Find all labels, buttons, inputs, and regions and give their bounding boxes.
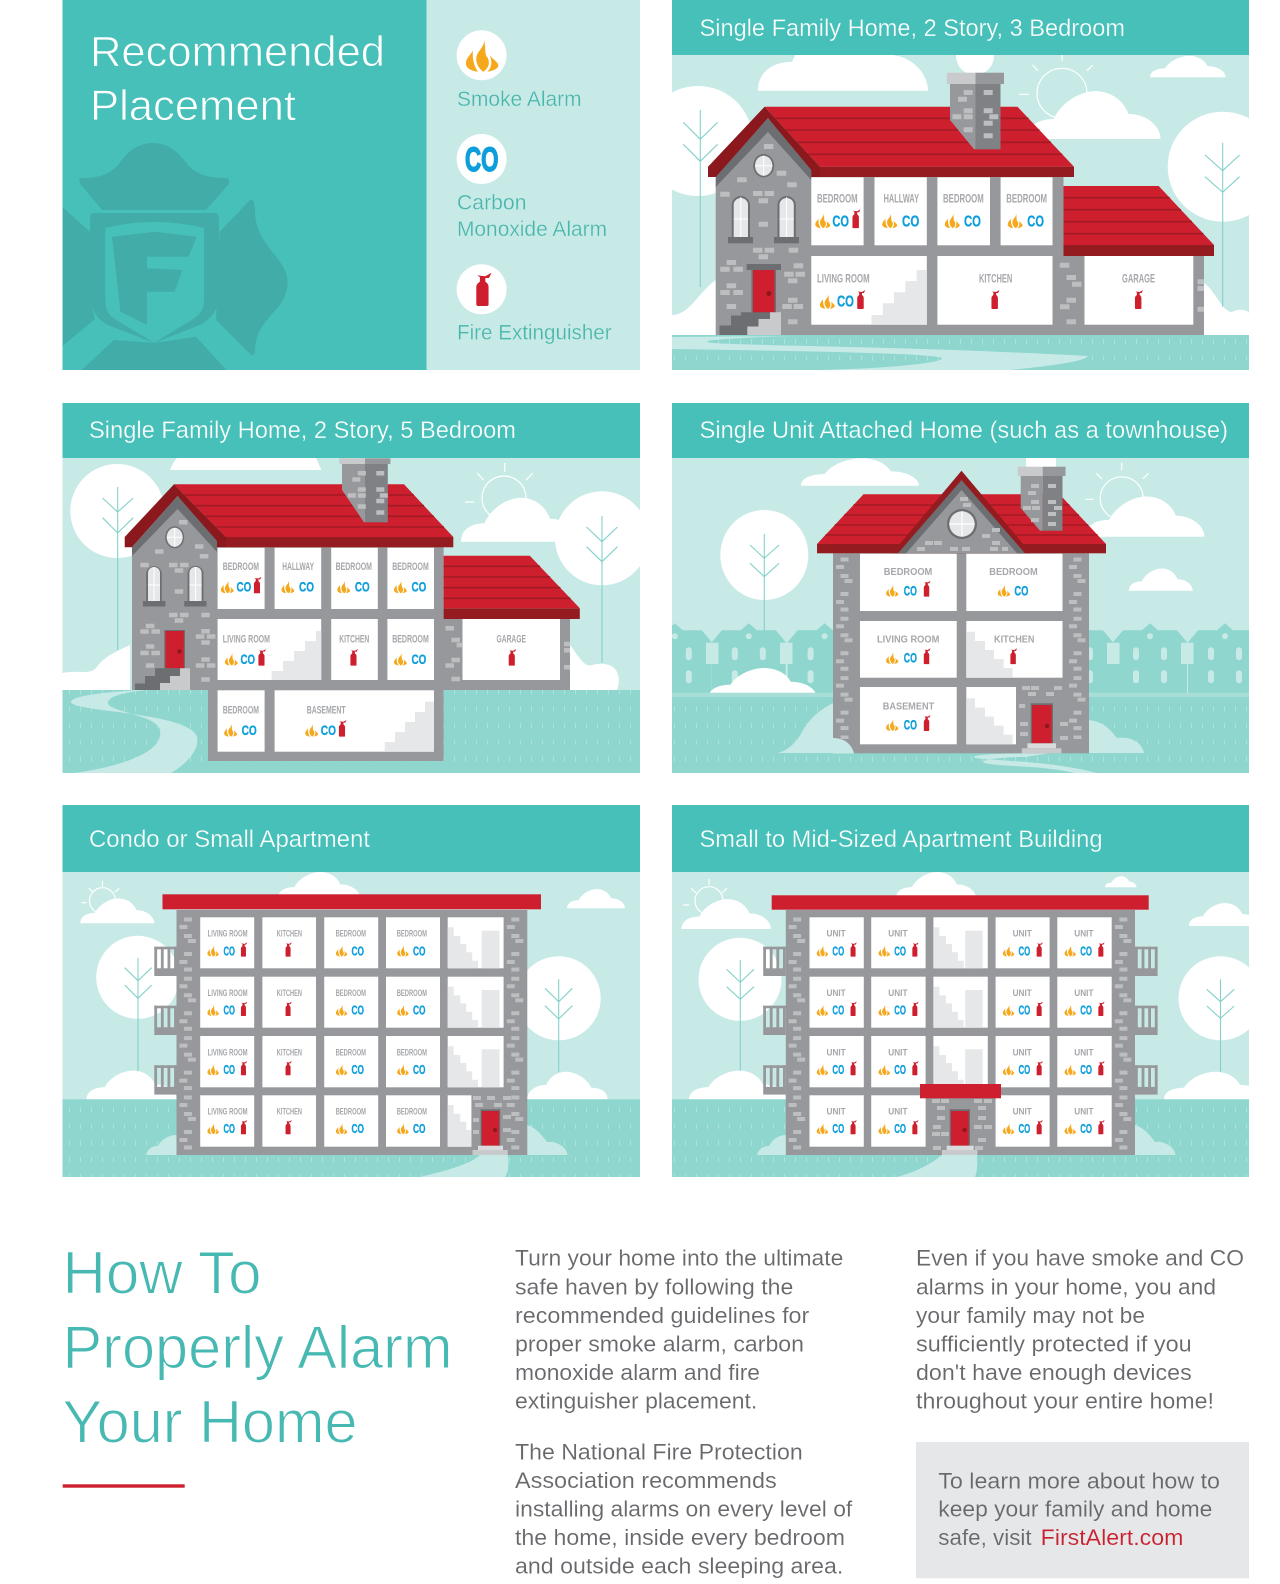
unit: CO xyxy=(1080,944,1092,958)
header: condo: Condo or Small Apartment xyxy=(89,826,370,853)
room: bedroom xyxy=(331,548,378,609)
unit xyxy=(810,917,864,968)
unit xyxy=(871,1036,926,1087)
unit xyxy=(996,977,1050,1028)
stairwell xyxy=(448,977,504,1028)
unit: CO xyxy=(1080,1063,1092,1077)
unit: CO xyxy=(1018,1063,1030,1077)
room: bedroom: CO xyxy=(413,1004,426,1018)
window: round attic xyxy=(753,154,774,177)
callout: learn more: To learn more about how to xyxy=(938,1468,1220,1493)
text block: intro paragraph: safe haven by following the xyxy=(515,1274,793,1299)
stairwell xyxy=(448,917,504,968)
clouds and sun xyxy=(80,872,625,923)
room: bedroom: CO xyxy=(413,1122,426,1136)
room: kitchen xyxy=(966,621,1062,678)
legend: carbon monoxide alarm: Monoxide Alarm xyxy=(457,218,607,241)
room: basement: CO xyxy=(904,717,917,732)
callout: learn more xyxy=(916,1442,1249,1578)
unit: UNIT xyxy=(826,1047,846,1058)
heading: how to properly alarm your home: Your Home xyxy=(62,1389,358,1456)
room: basement bedroom: BEDROOM xyxy=(223,705,259,717)
room: bedroom xyxy=(386,977,440,1028)
heading: how to properly alarm your home xyxy=(62,1240,452,1456)
panel: single unit attached home xyxy=(638,458,1262,790)
header: townhouse xyxy=(672,403,1249,458)
room: living room: LIVING ROOM xyxy=(208,929,248,940)
stairwell xyxy=(933,1036,988,1087)
building xyxy=(154,894,541,1155)
room: bedroom: BEDROOM xyxy=(397,988,427,999)
room: living room: CO xyxy=(224,1004,235,1018)
bricks xyxy=(179,918,523,1150)
front bush xyxy=(833,738,854,754)
unit: CO xyxy=(832,944,844,958)
room: hallway xyxy=(275,548,321,609)
house xyxy=(817,467,1106,790)
room: garage xyxy=(462,619,560,680)
stairwell xyxy=(966,687,1016,744)
room: bedroom: CO xyxy=(832,214,849,231)
unit: UNIT xyxy=(826,929,846,940)
unit xyxy=(996,1036,1050,1087)
room: bedroom: CO xyxy=(904,583,917,598)
tree left xyxy=(698,938,782,1072)
room: kitchen: KITCHEN xyxy=(277,929,302,940)
room: bedroom xyxy=(966,554,1062,611)
unit xyxy=(871,977,926,1028)
chimney xyxy=(947,73,1004,149)
callout: learn more: keep your family and home xyxy=(938,1497,1212,1522)
door with bricks xyxy=(1019,686,1068,753)
unit xyxy=(810,1095,864,1147)
background townhouses xyxy=(638,623,1262,693)
unit: CO xyxy=(832,1063,844,1077)
room: bedroom: CO xyxy=(352,1004,364,1018)
unit: UNIT xyxy=(1074,929,1094,940)
text block: intro paragraph: Turn your home into the ultimate xyxy=(515,1246,843,1271)
room: basement: CO xyxy=(321,722,336,738)
room: garage: GARAGE xyxy=(496,634,526,646)
unit xyxy=(871,1095,926,1147)
tree left xyxy=(96,936,179,1072)
light bushes xyxy=(776,702,1144,753)
panel: single family home 2 story 3 bedroom xyxy=(672,55,1249,370)
room: living room: LIVING ROOM xyxy=(223,634,270,646)
roof xyxy=(708,107,1074,187)
room: bedroom: BEDROOM xyxy=(336,988,366,999)
room: living room xyxy=(200,977,254,1028)
text block: protection paragraph: your family may not be xyxy=(916,1303,1145,1328)
room: bedroom xyxy=(1001,177,1052,245)
walkway xyxy=(974,753,1097,773)
legend: carbon monoxide alarm: CO xyxy=(465,141,498,179)
bottom clouds xyxy=(87,1071,608,1099)
room: bedroom: CO xyxy=(236,579,251,595)
room: living room: LIVING ROOM xyxy=(208,1106,248,1117)
room: bedroom: BEDROOM xyxy=(397,1047,427,1058)
balconies xyxy=(154,947,177,1095)
panel: condo or small apartment xyxy=(62,872,640,1177)
header: condo xyxy=(62,805,640,872)
room: bedroom xyxy=(387,619,434,680)
unit: UNIT xyxy=(1074,988,1094,999)
unit xyxy=(1057,977,1112,1028)
unit: CO xyxy=(894,944,906,958)
heading: how to properly alarm your home: How To xyxy=(62,1240,262,1307)
light bushes and walkway xyxy=(757,1125,1176,1177)
room: bedroom xyxy=(218,548,265,609)
unit xyxy=(1057,1036,1112,1087)
light bushes and walkway xyxy=(146,1125,568,1177)
unit: UNIT xyxy=(888,929,908,940)
unit xyxy=(996,917,1050,968)
clouds and sun xyxy=(62,458,619,690)
room: bedroom xyxy=(860,554,957,611)
roof xyxy=(125,484,453,556)
room: bedroom: BEDROOM xyxy=(989,566,1038,578)
room: bedroom xyxy=(324,1036,378,1087)
room: bedroom: CO xyxy=(413,1063,426,1077)
building xyxy=(763,895,1158,1155)
room: kitchen xyxy=(262,977,316,1028)
header: townhouse: Single Unit Attached Home (such as a townhouse) xyxy=(700,417,1228,444)
bricks xyxy=(789,918,1131,1150)
room: basement bedroom: CO xyxy=(242,722,257,738)
room: basement xyxy=(860,687,957,744)
legend: smoke alarm: Smoke Alarm xyxy=(457,88,582,111)
unit: CO xyxy=(1018,944,1030,958)
header: apartment building xyxy=(672,805,1249,872)
room: bedroom xyxy=(324,977,378,1028)
text block: NFPA paragraph: the home, inside every bedroom xyxy=(515,1525,845,1550)
unit: CO xyxy=(1080,1004,1092,1018)
text block: NFPA paragraph: Association recommends xyxy=(515,1468,777,1493)
title xyxy=(90,28,385,130)
unit xyxy=(996,1095,1050,1147)
unit xyxy=(1057,1095,1112,1147)
header: single family 3 bedroom xyxy=(672,0,1249,55)
walls xyxy=(716,128,1204,335)
room: kitchen xyxy=(262,1036,316,1087)
room: living room: LIVING ROOM xyxy=(208,1047,248,1058)
room: bedroom: CO xyxy=(412,579,426,595)
text block: protection paragraph: Even if you have smoke and CO xyxy=(916,1246,1244,1271)
room: living room xyxy=(200,917,254,968)
ground and path xyxy=(62,690,640,773)
text block: intro paragraph: recommended guidelines for xyxy=(515,1303,810,1328)
balconies xyxy=(763,947,1158,1095)
room: bedroom: BEDROOM xyxy=(817,193,858,205)
room: garage: GARAGE xyxy=(1122,274,1155,286)
unit: CO xyxy=(832,1122,844,1136)
tree right xyxy=(1168,112,1249,307)
panel: small to mid-sized apartment building xyxy=(672,872,1264,1177)
ground xyxy=(672,1099,1249,1177)
panel: legend xyxy=(426,0,640,370)
stairwell xyxy=(933,977,988,1028)
icon: First Alert fire shield watermark xyxy=(62,143,288,370)
room: hallway xyxy=(874,177,927,245)
room: kitchen: KITCHEN xyxy=(277,1047,302,1058)
room: hallway: HALLWAY xyxy=(884,193,919,205)
room: basement bedroom xyxy=(218,690,265,752)
title: Placement xyxy=(90,82,296,130)
heading: how to properly alarm your home: Properly Alarm xyxy=(62,1314,452,1381)
room: bedroom: BEDROOM xyxy=(392,634,429,646)
room: living room xyxy=(218,619,321,680)
room: living room: LIVING ROOM xyxy=(877,634,940,646)
window: arched left xyxy=(728,196,753,243)
text block: intro paragraph xyxy=(515,1246,843,1414)
unit: CO xyxy=(894,1004,906,1018)
unit xyxy=(871,917,926,968)
room: bedroom: BEDROOM xyxy=(392,561,429,573)
cloud foreground xyxy=(709,668,816,697)
room: bedroom: CO xyxy=(413,944,426,958)
bottom clouds xyxy=(689,1071,1264,1099)
tree right xyxy=(555,491,649,663)
callout: learn more: safe, visit xyxy=(938,1525,1032,1550)
room: kitchen xyxy=(262,917,316,968)
room: living room xyxy=(200,1036,254,1087)
room: bedroom: BEDROOM xyxy=(884,566,933,578)
header: single family 5 bedroom xyxy=(62,403,640,458)
text block: NFPA paragraph xyxy=(515,1439,853,1579)
unit: UNIT xyxy=(1013,1106,1032,1117)
room: living room xyxy=(811,256,927,325)
legend: fire extinguisher xyxy=(457,264,612,344)
unit: CO xyxy=(894,1122,906,1136)
window: arched left xyxy=(143,566,165,606)
callout: learn more: FirstAlert.com xyxy=(1041,1525,1183,1550)
room: bedroom xyxy=(386,917,440,968)
room: living room: CO xyxy=(837,294,854,311)
tree left xyxy=(70,464,164,650)
ground xyxy=(672,693,1249,773)
door xyxy=(472,1096,511,1155)
text block: NFPA paragraph: The National Fire Protection xyxy=(515,1439,803,1464)
house xyxy=(125,458,580,761)
room: bedroom: CO xyxy=(352,1122,364,1136)
room: living room: CO xyxy=(224,1063,235,1077)
text block: protection paragraph: throughout your entire home! xyxy=(916,1389,1214,1414)
room: bedroom: BEDROOM xyxy=(336,561,372,573)
room: bedroom xyxy=(387,548,434,609)
window: arched right xyxy=(774,196,799,243)
room: bedroom xyxy=(324,917,378,968)
stairwell xyxy=(448,1036,504,1087)
title: Recommended xyxy=(90,28,385,76)
room: bedroom xyxy=(386,1036,440,1087)
room: bedroom: BEDROOM xyxy=(1006,193,1047,205)
roof xyxy=(162,894,541,909)
window: arched right xyxy=(184,566,206,606)
chimney cap xyxy=(1018,467,1066,476)
text block: NFPA paragraph: and outside each sleeping area. xyxy=(515,1554,843,1579)
walls xyxy=(833,553,1089,753)
door xyxy=(164,630,185,668)
room: living room: CO xyxy=(224,1122,235,1136)
room: bedroom: CO xyxy=(964,214,981,231)
panel: single family home 2 story 5 bedroom xyxy=(62,458,649,773)
unit: CO xyxy=(832,1004,844,1018)
unit: UNIT xyxy=(1074,1047,1094,1058)
header: single family 5 bedroom: Single Family Home, 2 Story, 5 Bedroom xyxy=(89,417,516,444)
room: living room: CO xyxy=(904,651,917,666)
text block: protection paragraph xyxy=(916,1246,1244,1414)
panel: recommended placement title block xyxy=(62,0,426,370)
room: bedroom: CO xyxy=(355,579,370,595)
unit: UNIT xyxy=(1013,988,1032,999)
unit: UNIT xyxy=(826,988,846,999)
room: bedroom: CO xyxy=(412,651,426,667)
room: bedroom: BEDROOM xyxy=(336,1106,366,1117)
steps xyxy=(720,312,781,335)
unit: UNIT xyxy=(1074,1106,1094,1117)
text block: protection paragraph: alarms in your home, you and xyxy=(916,1274,1216,1299)
legend: carbon monoxide alarm xyxy=(457,134,607,241)
room: bedroom xyxy=(324,1095,378,1147)
garage roof xyxy=(444,556,580,619)
text block: protection paragraph: don't have enough devices xyxy=(916,1360,1192,1385)
room: hallway: CO xyxy=(902,214,919,231)
clouds and sun xyxy=(682,872,1259,929)
room: living room xyxy=(200,1095,254,1147)
room: basement: BASEMENT xyxy=(883,700,935,712)
tree right xyxy=(517,956,601,1072)
room: kitchen: KITCHEN xyxy=(994,634,1034,646)
room: bedroom: BEDROOM xyxy=(336,1047,366,1058)
room: living room xyxy=(860,621,957,678)
unit: UNIT xyxy=(888,988,908,999)
room: kitchen xyxy=(937,256,1052,325)
legend: smoke alarm xyxy=(457,30,582,111)
unit: CO xyxy=(1080,1122,1092,1136)
room: bedroom: CO xyxy=(1027,214,1044,231)
roof xyxy=(772,895,1149,910)
red accent rule xyxy=(63,1484,185,1488)
room: kitchen: KITCHEN xyxy=(277,988,302,999)
unit: CO xyxy=(894,1063,906,1077)
room: bedroom xyxy=(811,177,864,245)
legend: fire extinguisher: Fire Extinguisher xyxy=(457,321,612,344)
header: apartment building: Small to Mid-Sized Apartment Building xyxy=(700,826,1102,853)
room: bedroom: BEDROOM xyxy=(223,561,259,573)
chimney xyxy=(339,458,390,522)
house xyxy=(708,73,1214,335)
room: bedroom: CO xyxy=(352,944,364,958)
legend: carbon monoxide alarm: Carbon xyxy=(457,191,526,214)
room: basement: BASEMENT xyxy=(307,705,346,717)
room: bedroom: CO xyxy=(352,1063,364,1077)
room: hallway: CO xyxy=(299,579,314,595)
room: living room: LIVING ROOM xyxy=(817,274,870,286)
unit xyxy=(1057,917,1112,968)
text block: intro paragraph: extinguisher placement. xyxy=(515,1389,757,1414)
entrance: awning and door xyxy=(920,1084,1001,1155)
unit: UNIT xyxy=(826,1106,846,1117)
window: round attic xyxy=(165,526,184,548)
unit: CO xyxy=(1018,1004,1030,1018)
text block: intro paragraph: proper smoke alarm, carbon xyxy=(515,1332,804,1356)
unit: UNIT xyxy=(1013,1047,1032,1058)
unit xyxy=(810,977,864,1028)
window: round attic xyxy=(947,509,977,539)
room: bedroom: BEDROOM xyxy=(336,929,366,940)
text block: protection paragraph: sufficiently protected if you xyxy=(916,1332,1192,1356)
room: living room: CO xyxy=(240,651,255,667)
room: kitchen xyxy=(331,619,378,680)
ground and path xyxy=(672,335,1249,370)
room: kitchen: KITCHEN xyxy=(339,634,369,646)
unit: UNIT xyxy=(888,1047,908,1058)
room: bedroom: BEDROOM xyxy=(397,929,427,940)
room: bedroom: BEDROOM xyxy=(397,1106,427,1117)
room: kitchen: KITCHEN xyxy=(979,274,1012,286)
room: kitchen: KITCHEN xyxy=(277,1106,302,1117)
unit: CO xyxy=(1018,1122,1030,1136)
tree xyxy=(720,510,808,668)
steps xyxy=(135,668,190,690)
walls xyxy=(132,501,570,761)
stairwell xyxy=(933,917,988,968)
text block: intro paragraph: monoxide alarm and fire xyxy=(515,1360,760,1385)
roof xyxy=(817,471,1106,553)
clouds and sun xyxy=(672,22,1249,335)
tree left xyxy=(672,86,750,287)
room: hallway: HALLWAY xyxy=(282,561,314,573)
room: bedroom xyxy=(386,1095,440,1147)
unit: UNIT xyxy=(888,1106,908,1117)
unit: UNIT xyxy=(1013,929,1032,940)
room: living room: CO xyxy=(224,944,235,958)
door xyxy=(747,264,781,314)
room: bedroom: CO xyxy=(1014,583,1028,598)
room: garage xyxy=(1084,256,1193,325)
room: living room: LIVING ROOM xyxy=(208,988,248,999)
tree right xyxy=(1178,956,1262,1072)
text block: NFPA paragraph: installing alarms on every level of xyxy=(515,1496,853,1522)
stairwell xyxy=(448,1095,471,1147)
room: bedroom: BEDROOM xyxy=(943,193,984,205)
clouds and sun xyxy=(801,458,1204,591)
room: basement xyxy=(275,690,434,752)
ground xyxy=(62,1099,640,1177)
room: bedroom xyxy=(937,177,990,245)
unit xyxy=(810,1036,864,1087)
room: kitchen xyxy=(262,1095,316,1147)
garage roof xyxy=(1064,186,1214,256)
header: single family 3 bedroom: Single Family Home, 2 Story, 3 Bedroom xyxy=(700,15,1125,42)
